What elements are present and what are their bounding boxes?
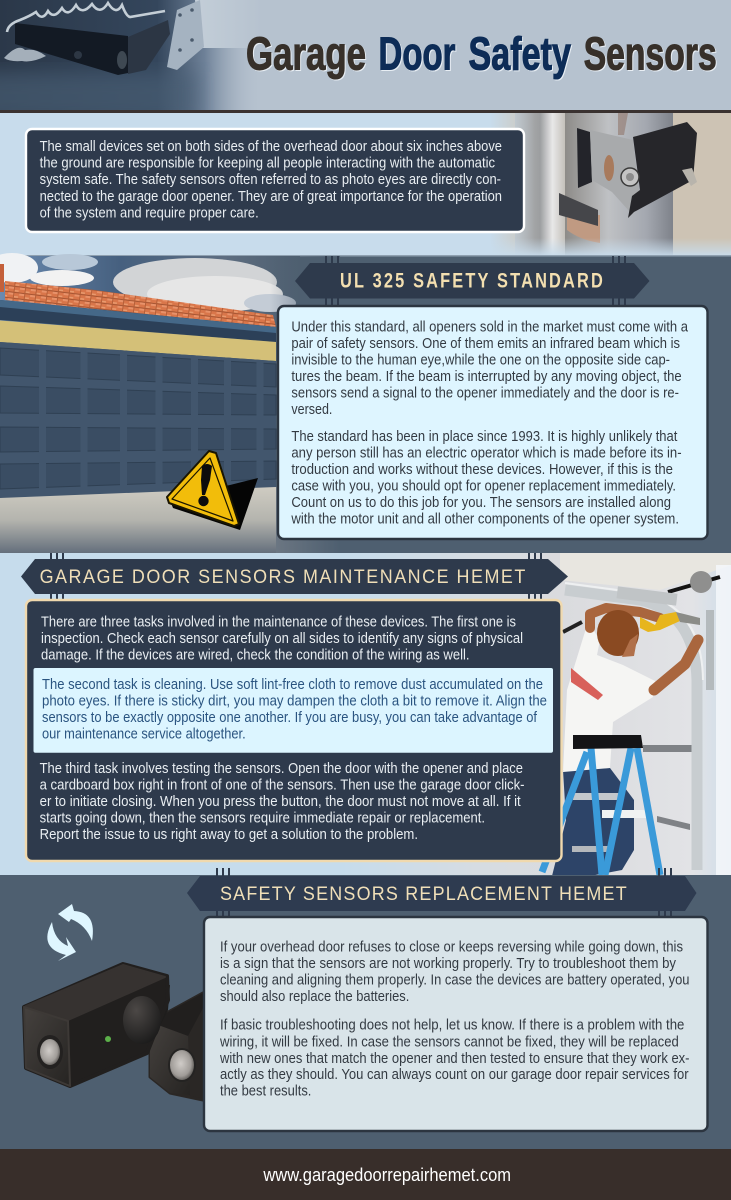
UL 325 text: tures the beam. If the beam is interrupted by any moving object, the [291,368,682,385]
UL 325 text: pair of safety sensors. One of them emits an infrared beam which is [291,335,680,352]
UL 325 text: invisible to the human eye,while the one on the opposite side cap- [291,352,670,368]
intro text [40,138,502,221]
intro text box [26,129,524,232]
second task text: sensors to be exactly opposite one another. If you are busy, you can take advantage of [42,709,538,726]
heading: UL 325 safety standard: UL 325 SAFETY STANDARD [340,269,603,292]
second task text: photo eyes. If there is sticky dirt, you may dampen the cloth a bit to remove it. Align the [42,692,547,710]
maintenance text box [26,600,562,861]
photo: worker on ladder at door track [340,553,731,876]
title: Garage [246,28,366,80]
UL 325 text box [278,306,708,539]
second task callout [34,668,553,753]
intro text: nected to the garage door opener. They are of great importance for the operation [40,188,502,205]
photo: sensor bracket on track [490,113,731,255]
title: Safety [468,28,571,80]
section: UL 325 [0,253,731,553]
third task text: The third task involves testing the sensors. Open the door with the opener and place [40,760,523,777]
heading: garage door sensors maintenance: GARAGE DOOR SENSORS MAINTENANCE HEMET [40,565,525,587]
replacement text: wiring, it will be fixed. In case the sensors cannot be fixed, they will be replaced [219,1033,679,1050]
title: Door [378,28,456,80]
section: intro [0,113,731,255]
UL 325 text: sensors send a signal to the opener immediately and the door is re- [291,384,679,402]
UL 325 text: Count on us to do this job for you. The sensors are installed along [291,494,671,511]
heading: safety sensors replacement [187,868,696,917]
second task text: The second task is cleaning. Use soft lint-free cloth to remove dust accumulated on the [42,676,543,693]
UL 325 text: The standard has been in place since 1993. It is highly unlikely that [291,428,678,445]
section: replacement [0,868,731,1149]
intro text: The small devices set on both sides of the overhead door about six inches above [40,138,502,155]
heading: garage door sensors maintenance [21,553,568,600]
third task text: Report the issue to us right away to get a solution to the problem. [40,826,418,843]
intro text: of the system and require proper care. [40,204,259,221]
third task text: starts going down, then the sensors require immediate repair or replacement. [40,810,485,827]
heading: safety sensors replacement: SAFETY SENSORS REPLACEMENT HEMET [220,882,627,904]
website url: www.garagedoorrepairhemet.com [262,1165,511,1185]
photo: garage with roof and door [0,253,340,553]
step ladder [542,735,660,875]
third task text: er to initiate closing. When you press the button, the door must not move at all. If it [40,793,521,810]
first task text [41,613,523,663]
second task text: our maintenance service altogether. [42,726,246,743]
replacement text box [204,917,708,1131]
UL 325 text: case with you, you should opt for opener replacement immediately. [291,478,676,494]
section: maintenance [0,553,731,876]
heading: UL 325 safety standard [295,256,650,306]
replacement text: is a sign that the sensors are not working properly. Try to troubleshoot them by [220,955,676,972]
UL 325 text [291,318,689,528]
title [246,28,717,80]
intro text: system safe. The safety sensors often referred to as photo eyes are directly con- [40,171,501,188]
UL 325 text: with the motor unit and all other components of the opener system. [291,510,679,528]
header band [0,0,731,122]
worker [552,608,700,876]
first task text: There are three tasks involved in the maintenance of these devices. The first one is [41,613,516,630]
icon: warning triangle [167,451,258,530]
icon: refresh arrows [47,904,93,961]
second task text [42,676,547,743]
third task text [40,760,524,843]
first task text: inspection. Check each sensor carefully on all sides to identify any signs of physical [41,630,523,647]
photo: pair of safety sensors [24,964,203,1100]
footer [0,1149,731,1200]
photo: sensor on garage floor [0,0,242,110]
third task text: a cardboard box right in front of one of the sensors. Then use the garage door click- [40,777,524,794]
UL 325 text: any person still has an electric operator which is made before its in- [291,444,682,462]
replacement text: the best results. [220,1083,311,1100]
intro text: the ground are responsible for keeping all people interacting with the automatic [40,155,495,172]
UL 325 text: versed. [291,401,332,418]
replacement text [219,938,690,1100]
replacement text: should also replace the batteries. [220,988,409,1005]
first task text: damage. If the devices are wired, check the condition of the wiring as well. [41,646,470,663]
UL 325 text: troduction and works without these devices. However, if this is the [291,461,673,478]
